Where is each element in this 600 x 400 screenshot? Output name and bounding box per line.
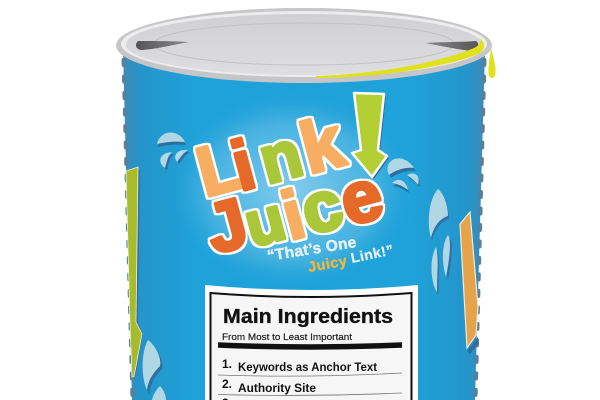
list item 1: 1. bbox=[222, 357, 232, 371]
word: Link: i bbox=[224, 125, 263, 205]
word: Juice: c bbox=[293, 164, 350, 249]
word: Juice: u bbox=[238, 184, 292, 261]
heading: Main Ingredients bbox=[223, 306, 393, 328]
word: Link: k bbox=[292, 102, 353, 189]
list item 2: Authority Site bbox=[238, 381, 316, 395]
word: Juice: J bbox=[198, 183, 255, 268]
tagline: Link!” bbox=[349, 241, 395, 266]
list item 2 bbox=[222, 377, 316, 395]
ingredients label bbox=[205, 285, 418, 400]
list item 1: Keywords as Anchor Text bbox=[238, 360, 377, 374]
tagline: Juicy bbox=[307, 253, 348, 276]
logo: Link Juice bbox=[189, 93, 391, 268]
list item 2: 2. bbox=[222, 377, 232, 391]
word: Link: n bbox=[251, 116, 310, 198]
yellow juice drip bbox=[316, 38, 496, 78]
word: Link: L bbox=[189, 125, 250, 211]
word: Link bbox=[189, 102, 353, 211]
water splash: logo right bbox=[388, 158, 420, 193]
wrapped logo fragment: green arrow on left side bbox=[126, 167, 143, 379]
can body bbox=[123, 50, 485, 400]
tagline bbox=[266, 234, 395, 276]
subheading: From Most to Least Important bbox=[222, 332, 352, 343]
wrapped logo fragment: orange letter on right side bbox=[460, 212, 478, 354]
word: Juice bbox=[198, 154, 391, 268]
logo glow bbox=[170, 92, 414, 288]
logo arrow bbox=[354, 95, 389, 179]
water splash: logo left bbox=[157, 132, 190, 170]
can lid bbox=[116, 8, 492, 83]
water splashes: right side bbox=[429, 189, 452, 295]
water splashes: left side bottom bbox=[143, 340, 166, 400]
tagline: “That’s One bbox=[266, 234, 358, 265]
word: Juice: e bbox=[331, 154, 391, 241]
word: Juice: i bbox=[274, 176, 312, 254]
lid punch marks bbox=[136, 41, 189, 50]
